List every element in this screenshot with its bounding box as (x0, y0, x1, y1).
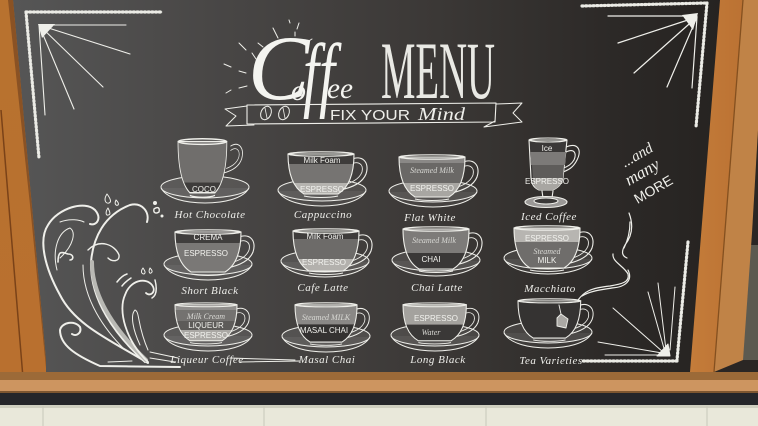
cup body (399, 155, 478, 200)
cup: Liqueur Coffee: LIQUEUR (188, 321, 224, 330)
saucer (164, 253, 252, 280)
wood frame left (0, 0, 46, 380)
cup: Cafe Latte: ESPRESSO (302, 258, 346, 267)
cup: Chai Latte: CHAI (421, 255, 441, 264)
ingredient labels: Milk Foam (307, 232, 344, 241)
icon: tea bag (557, 305, 568, 328)
wood frame right (690, 0, 758, 372)
cup: Iced Coffee: ESPRESSO (525, 177, 569, 186)
black skirting strip (0, 393, 758, 405)
saucer (389, 180, 477, 207)
title: Coffee: ee (327, 72, 353, 105)
banner text: Mind (417, 104, 466, 124)
saucer (391, 324, 479, 351)
ingredient label: COCO (192, 185, 216, 194)
cup body (295, 303, 369, 345)
cup body (403, 227, 482, 272)
ingredient labels: Steamed MILK (302, 313, 351, 322)
wall tiles (0, 405, 758, 426)
cup: Masal Chai (282, 303, 370, 352)
label: Masal Chai (298, 354, 355, 366)
handwritten note: and many more: ...and (619, 140, 656, 171)
cup body (514, 226, 593, 272)
cup: Chai Latte (392, 227, 482, 276)
saucer (278, 179, 366, 206)
chalk splash swirls (43, 194, 300, 367)
cup: Macchiato: Steamed (533, 247, 562, 256)
cup body (175, 230, 254, 276)
swirl: small right (122, 281, 154, 362)
text: MENU (381, 25, 495, 116)
right wall patch (740, 245, 758, 360)
cup: Flat White (389, 155, 478, 207)
label: Macchiato (523, 283, 576, 295)
saucer (281, 250, 369, 277)
saucer (164, 324, 252, 351)
corner ornament: bottom right (582, 242, 688, 361)
tall mug (178, 139, 242, 197)
glass body (529, 138, 579, 190)
cup: Iced Coffee (525, 138, 579, 208)
label: Iced Coffee (520, 211, 577, 223)
label: Long Black (409, 354, 466, 366)
cup: Flat White: ESPRESSO (410, 184, 454, 193)
banner text: FIX YOUR (330, 107, 410, 124)
corner ornament: top left (26, 12, 162, 158)
label: Flat White (403, 212, 456, 224)
cup: Cappuccino: ESPRESSO (300, 185, 344, 194)
ingredient labels: Steamed Milk (410, 166, 454, 175)
banner ribbon (225, 103, 522, 127)
ingredient labels: ESPRESSO (414, 314, 458, 323)
saucer (504, 247, 592, 274)
saucer (504, 321, 592, 348)
title: Coffee: o (291, 74, 306, 107)
cup: Hot Chocolate (161, 139, 249, 203)
icon: coffee beans (259, 105, 291, 121)
cup: Macchiato: MILK (538, 256, 557, 265)
label: Liqueur Coffee (169, 354, 244, 366)
cup body (288, 152, 367, 198)
label: Tea Varieties (519, 355, 583, 367)
cup: Long Black: Water (422, 328, 441, 337)
splash droplets (105, 194, 152, 274)
ingredient labels: ESPRESSO (525, 234, 569, 243)
ingredient labels: Milk Foam (304, 156, 341, 165)
ingredient labels: CREMA (194, 233, 223, 242)
title: Coffee (248, 17, 353, 120)
cup body (293, 229, 372, 274)
label: Hot Chocolate (174, 209, 245, 221)
cup: Long Black (391, 303, 479, 351)
cup: Cappuccino (278, 152, 367, 206)
sun rays around title (224, 20, 312, 93)
label: Short Black (181, 285, 239, 297)
cup body (403, 303, 479, 344)
cup: Tea Varieties (504, 299, 593, 348)
handwritten note: and many more: many (621, 154, 663, 189)
banner text (330, 104, 466, 124)
cup: Short Black (164, 230, 254, 280)
saucer (282, 325, 370, 352)
ingredient labels: Steamed Milk (412, 236, 456, 245)
label: Cafe Latte (297, 282, 349, 294)
swirl: bottom curl (60, 323, 180, 367)
cup: Short Black: ESPRESSO (184, 249, 228, 258)
handwritten note: and many more (613, 140, 675, 207)
swirl: centre (91, 204, 148, 362)
cup: Liqueur Coffee: ESPRESSO (184, 331, 228, 340)
title: Coffee: ff (303, 27, 342, 120)
cup: Liqueur Coffee (164, 303, 252, 351)
glass stem and base (525, 191, 567, 208)
ingredient labels: Ice (542, 144, 553, 153)
title: Coffee: C (248, 17, 311, 119)
saucer (161, 176, 249, 203)
label: Chai Latte (411, 282, 463, 294)
cup body (175, 303, 249, 344)
handwritten note: and many more: MORE (631, 172, 675, 207)
cup body (518, 299, 593, 341)
cup: Masal Chai: MASAL CHAI (300, 326, 348, 335)
steam from tea cup (578, 213, 632, 300)
wood ledge (0, 372, 758, 393)
cup: Cafe Latte (281, 229, 372, 277)
ingredient labels: Milk Cream (186, 312, 225, 321)
saucer (392, 249, 480, 276)
corner ornament: top right (582, 3, 707, 127)
swirl: left (43, 206, 148, 363)
label: Cappuccino (294, 209, 352, 221)
cup: Macchiato (504, 226, 593, 274)
